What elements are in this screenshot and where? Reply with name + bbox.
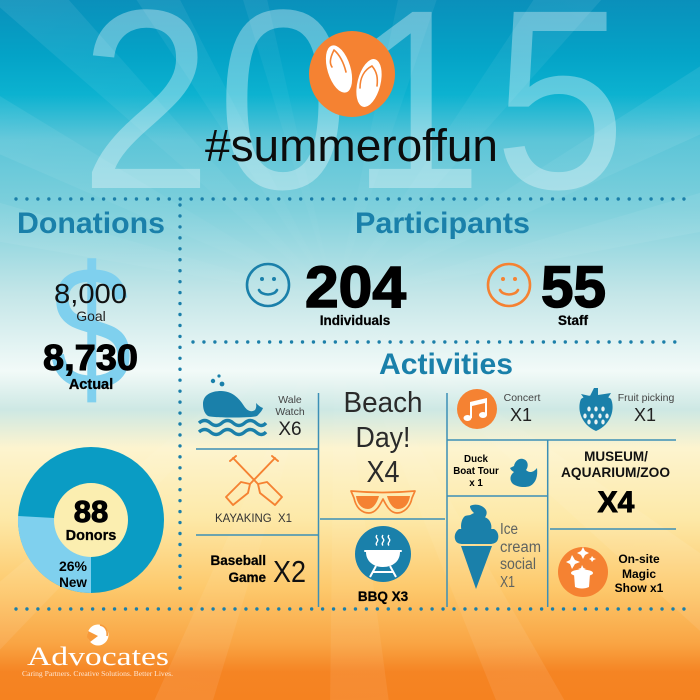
icon: magic hat	[558, 547, 608, 597]
activity: magic show: Magic	[622, 567, 656, 581]
donut chart: donors: New	[59, 575, 87, 590]
title hashtag: #summeroffun	[205, 120, 498, 171]
goal amount: 8,000	[54, 278, 127, 309]
activity: museum aquarium zoo: X4	[598, 486, 635, 519]
actual amount: 8,730	[43, 337, 138, 378]
activity: kayaking	[215, 456, 292, 525]
activity: magic show	[558, 547, 664, 597]
dotted dividers	[16, 199, 686, 609]
activity: duck boat tour: x 1	[469, 478, 483, 489]
donut chart: donors: 88	[74, 494, 108, 529]
activity: ice cream social	[455, 505, 541, 591]
activity: baseball game: Baseball	[210, 553, 266, 568]
logo: Advocates: Advocates	[27, 642, 169, 671]
activities grid lines	[196, 393, 676, 607]
staff label: Staff	[558, 313, 589, 328]
activity: ice cream social: Ice	[500, 521, 518, 538]
donut chart: donors: Donors	[66, 528, 116, 544]
activity: museum aquarium zoo: MUSEUM/	[584, 449, 648, 464]
activity: beach day: X4	[366, 454, 400, 489]
heading: Donations: Donations	[17, 207, 165, 240]
individuals label: Individuals	[320, 313, 390, 328]
logo: Advocates	[22, 624, 173, 678]
logo: Advocates: Caring Partners. Creative Solutions. Better Lives.	[22, 669, 173, 678]
panel: participants	[247, 207, 606, 328]
activity: concert: Concert	[504, 392, 540, 404]
activity: kayaking: KAYAKING X1	[215, 511, 292, 525]
actual label: Actual	[69, 377, 113, 393]
icon: orange smiley	[488, 264, 530, 306]
icon: grill	[355, 526, 411, 582]
activity: beach day: Beach	[344, 387, 422, 419]
icon: dollar sign: $	[50, 229, 132, 428]
icon: blue smiley	[247, 264, 289, 306]
activity: ice cream social: cream	[500, 539, 541, 556]
activity: museum aquarium zoo	[561, 449, 670, 519]
activity: beach day: Day!	[356, 422, 410, 454]
panel: donations	[17, 207, 165, 428]
activity: magic show: On-site	[618, 552, 660, 566]
icon: music note	[457, 389, 497, 429]
activity: baseball game: X2	[273, 554, 306, 589]
icon: strawberry	[579, 388, 613, 431]
activity: baseball game	[210, 553, 306, 589]
activity: fruit picking	[579, 388, 674, 431]
activity: fruit picking: Fruit picking	[618, 392, 674, 404]
activity: whale watch: Wale	[278, 394, 302, 406]
activity: ice cream social: social	[500, 556, 536, 573]
activity: barbecue: BBQ X3	[358, 589, 409, 604]
big year 2015	[80, 0, 626, 243]
icon: ice cream cone	[455, 505, 498, 589]
icon: rubber duck	[510, 459, 537, 487]
icon: sunglasses	[351, 491, 415, 513]
activity: barbecue	[355, 526, 411, 604]
donut chart: donors: 26%	[59, 558, 88, 574]
activity: concert	[457, 389, 540, 429]
activity: beach day	[344, 387, 422, 513]
goal label: Goal	[76, 308, 106, 324]
activity: duck boat tour	[453, 454, 537, 489]
activity: duck boat tour: Boat Tour	[453, 466, 499, 477]
individuals count: 204	[305, 255, 406, 320]
heading: Activities: Activities	[379, 348, 513, 381]
activity: fruit picking: X1	[634, 405, 656, 425]
activity: whale watch: Watch	[275, 406, 305, 418]
activity: concert: X1	[510, 405, 532, 425]
icon: crossed paddles	[226, 456, 282, 505]
activity: baseball game: Game	[228, 570, 266, 585]
donut chart: donors	[18, 447, 164, 593]
activity: museum aquarium zoo: AQUARIUM/ZOO	[561, 465, 670, 480]
activity: ice cream social: X1	[500, 574, 515, 591]
activity: whale watch: X6	[278, 419, 302, 440]
heading: Participants: Participants	[355, 207, 530, 240]
icon: whale	[199, 374, 266, 434]
activity: whale watch	[199, 374, 305, 440]
staff count: 55	[541, 255, 606, 320]
activity: duck boat tour: Duck	[464, 454, 489, 465]
icon: flip-flops badge	[309, 31, 395, 117]
activity: magic show: Show x1	[615, 581, 664, 595]
